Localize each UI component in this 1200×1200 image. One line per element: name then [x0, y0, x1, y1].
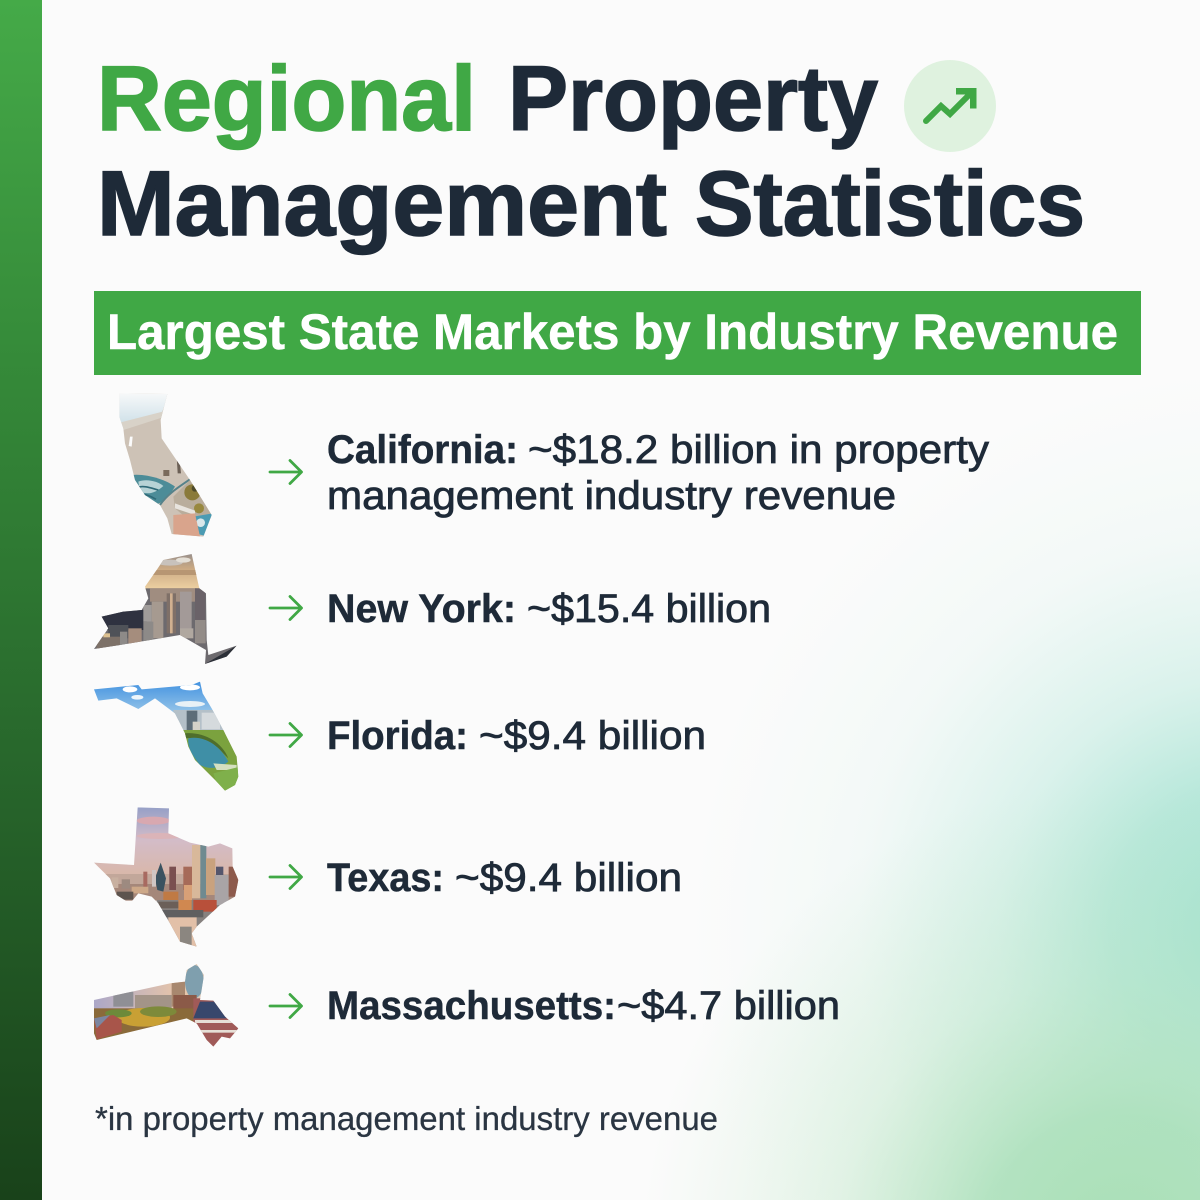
arrow: Massachusetts — [270, 994, 302, 1018]
state image: Texas — [94, 808, 238, 946]
text: Texas: ~$9.4 billion — [455, 856, 682, 900]
text: Texas: Texas: — [327, 856, 444, 900]
state image: Massachusetts — [90, 963, 243, 1048]
footnote: *in property management industry revenue — [95, 1101, 718, 1138]
icon: trending up arrow — [904, 60, 996, 152]
text: New York: New York: — [327, 587, 516, 631]
text: New York: ~$15.4 billion — [527, 587, 771, 631]
text: California: California: — [327, 428, 518, 472]
arrow: California — [270, 460, 302, 484]
subtitle banner: Largest State Markets by Industry Revenue — [107, 304, 1118, 360]
text: New York — [327, 587, 771, 631]
title: Regional — [97, 48, 476, 150]
text: Massachusetts: Massachusetts: — [327, 984, 616, 1028]
text: Texas — [327, 856, 682, 900]
title: Property — [508, 48, 878, 150]
title: Management — [97, 153, 667, 255]
text: California: management industry revenue — [327, 474, 896, 518]
state image: Florida — [90, 680, 243, 793]
state image: New York — [94, 554, 236, 664]
title — [97, 48, 1085, 255]
text: Florida: ~$9.4 billion — [479, 714, 706, 758]
state image: California — [119, 394, 212, 536]
text: California — [327, 428, 989, 518]
title: Statistics — [695, 153, 1085, 255]
subtitle banner — [94, 291, 1141, 375]
text: California: ~$18.2 billion in property — [528, 428, 989, 472]
arrow: Texas — [270, 866, 302, 888]
text: Florida — [327, 714, 706, 758]
arrow: New York — [270, 596, 302, 620]
arrow: Florida — [270, 724, 302, 746]
text: Massachusetts — [327, 984, 840, 1028]
text: Massachusetts: ~$4.7 billion — [617, 984, 840, 1028]
text: Florida: Florida: — [327, 714, 468, 758]
left green bar — [0, 0, 42, 1200]
